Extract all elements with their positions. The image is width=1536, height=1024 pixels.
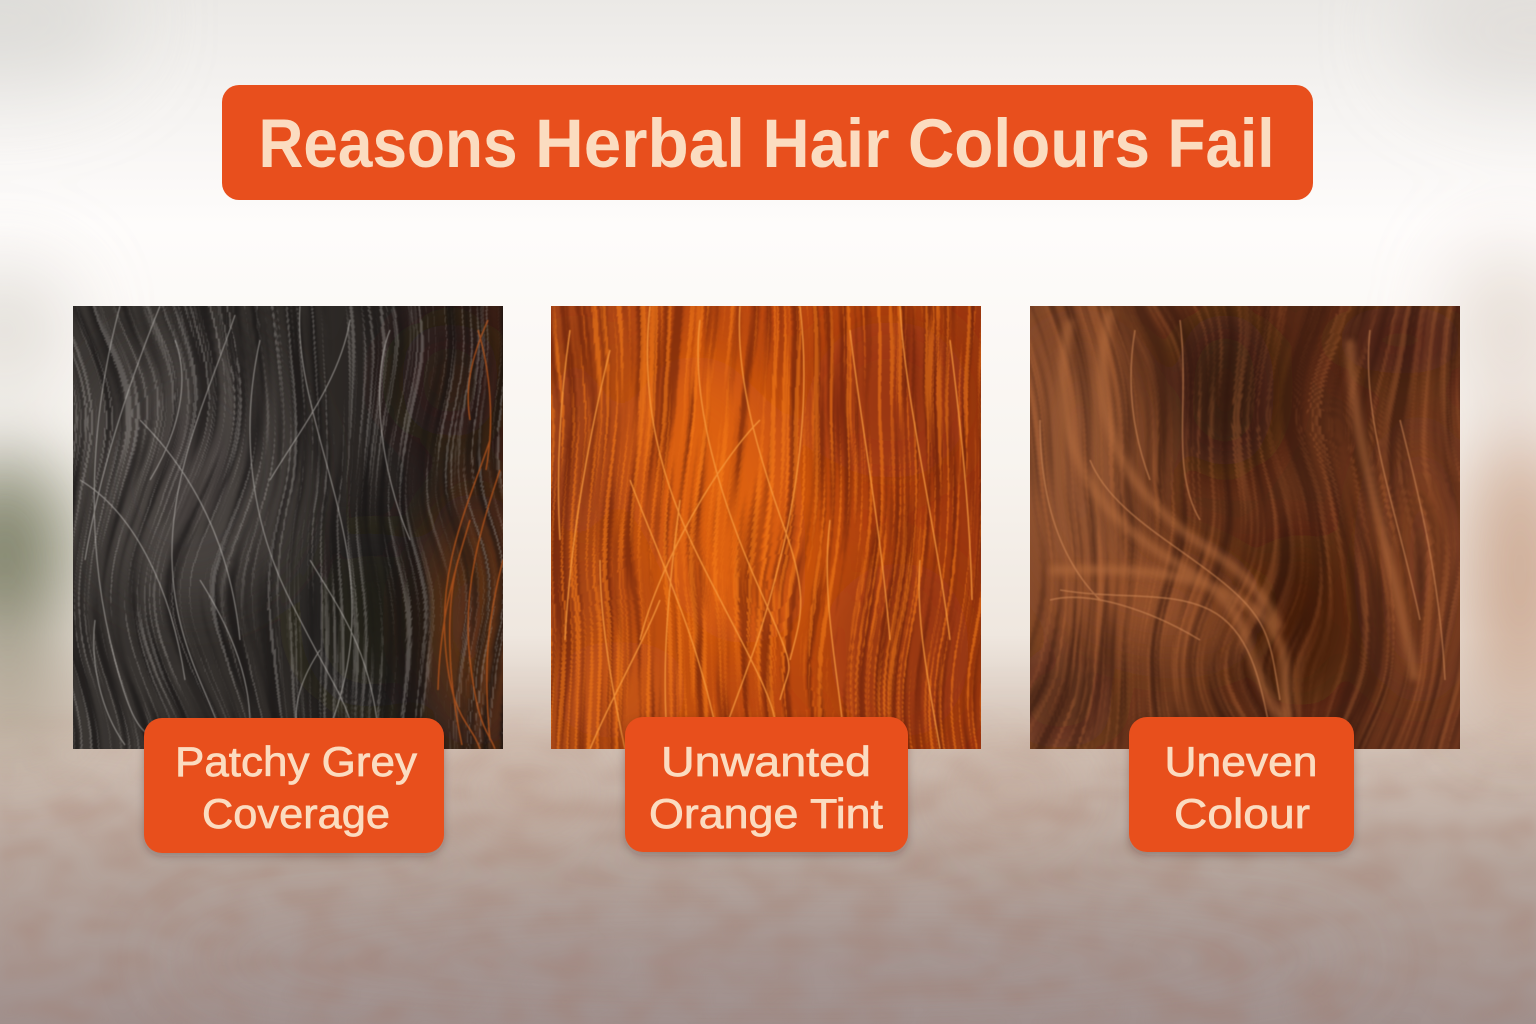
label: uneven colour: Uneven xyxy=(1164,738,1318,785)
title: Hair xyxy=(762,105,890,182)
title: Fail xyxy=(1168,105,1274,182)
label: patchy grey coverage: Patchy Grey xyxy=(175,738,417,785)
label: unwanted orange tint xyxy=(625,717,908,852)
label: uneven colour xyxy=(1129,717,1354,852)
label: patchy grey coverage xyxy=(144,718,444,853)
label: unwanted orange tint: Unwanted xyxy=(661,738,871,785)
title: Colours xyxy=(908,105,1150,182)
label: unwanted orange tint: Orange Tint xyxy=(649,790,883,837)
label: patchy grey coverage: Coverage xyxy=(202,790,390,837)
panel: patchy grey coverage hair photo xyxy=(73,306,507,750)
title: Reasons xyxy=(258,105,518,182)
panel: uneven colour hair photo xyxy=(1005,306,1470,750)
title: Herbal xyxy=(535,105,745,182)
label: uneven colour: Colour xyxy=(1174,790,1310,837)
panel: unwanted orange tint hair photo xyxy=(545,306,981,749)
title banner xyxy=(222,85,1313,200)
title xyxy=(258,105,1274,182)
